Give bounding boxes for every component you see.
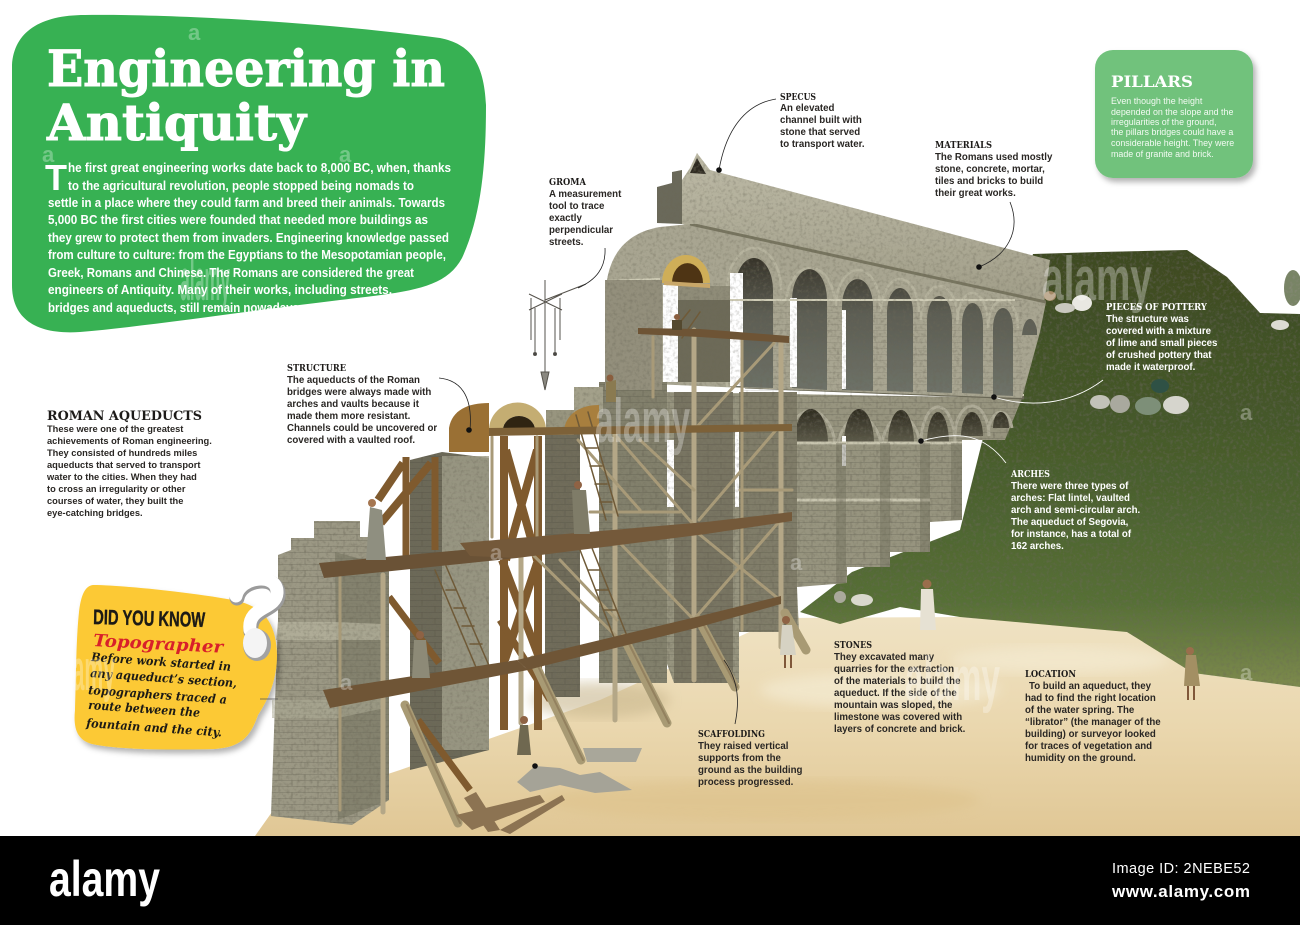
stock watermarks: alamy: [180, 248, 230, 313]
did you know text: route between the: [88, 698, 201, 720]
label: location: “librator” (the manager of the: [1025, 717, 1161, 728]
workers and figures: [366, 314, 1200, 755]
alamy logo: alamy: [49, 851, 160, 907]
drop cap: T: [45, 157, 67, 198]
stock watermarks: alamy: [1042, 245, 1152, 314]
label: pieces of pottery: of crushed pottery that: [1106, 350, 1212, 361]
timber centering and bracing: [378, 403, 599, 790]
footer band: [0, 836, 1300, 925]
did you know text: topographers traced a: [88, 683, 227, 707]
did you know text: [85, 650, 237, 739]
label: scaffolding: They raised vertical: [698, 741, 788, 752]
label: stones: They excavated many: [834, 652, 935, 663]
label: stones: quarries for the extraction: [834, 664, 954, 675]
label: stones: aqueduct. If the side of the: [834, 688, 957, 699]
green blob: [12, 15, 486, 332]
text block: Roman aqueducts: eye-catching bridges.: [47, 508, 143, 518]
intro text: engineers of Antiquity. Many of their works, including streets,: [48, 282, 392, 297]
label: materials: their great works.: [935, 188, 1016, 199]
label: structure: covered with a vaulted roof.: [287, 435, 415, 446]
intro text: he first great engineering works date back to 8,000 BC, when, thanks: [68, 160, 451, 175]
label: structure: bridges were always made with: [287, 387, 431, 398]
label: scaffolding: ground as the building: [698, 765, 802, 776]
label: specus: [780, 92, 865, 150]
pillars text: depended on the slope and the: [1111, 107, 1233, 117]
label: groma: streets.: [549, 237, 584, 248]
label: arches: ARCHES: [1010, 469, 1050, 480]
icon: tree at far right: [1284, 270, 1300, 306]
icon: question mark: [236, 579, 278, 661]
stock watermarks: a: [339, 142, 352, 167]
pillars heading: PILLARS: [1111, 72, 1193, 91]
label: stones: [834, 640, 966, 735]
scaffolding decks: [319, 328, 792, 708]
grassy hill: [800, 250, 1300, 687]
label: groma: tool to trace: [549, 201, 605, 212]
text block: Roman aqueducts: These were one of the greatest: [47, 424, 183, 434]
aqueduct: lower tier: [662, 384, 1024, 683]
leader: specus: [716, 99, 776, 173]
label: structure: arches and vaults because it: [287, 399, 420, 410]
intro text: 5,000 BC the first cities were founded that needed more buildings as: [48, 212, 428, 227]
did you know text: any aqueduct’s section,: [90, 666, 237, 690]
aqueduct: upper tier with arches: [606, 224, 1046, 398]
leader: arches: [918, 436, 1006, 463]
label: location: building) or surveyor looked: [1025, 729, 1156, 740]
intro text: they grew to protect them from invaders. Engineering knowledge passed: [48, 230, 449, 245]
label: specus: channel built with: [780, 115, 862, 126]
text block: Roman aqueducts: achievements of Roman engineering.: [47, 436, 212, 446]
pillars text: Even though the height: [1111, 96, 1203, 106]
label: location: LOCATION: [1025, 669, 1076, 680]
stock watermarks: a: [188, 20, 201, 45]
leader: scaffolding: [724, 660, 737, 724]
pillars text: considerable height. They were: [1111, 138, 1234, 148]
leader: rubble dot: [532, 763, 538, 769]
did you know heading: DID YOU KNOW: [93, 606, 206, 632]
intro text: Greek, Romans and Chinese. The Romans are considered the great: [48, 265, 415, 280]
label: arches: arch and semi-circular arch.: [1011, 505, 1141, 516]
label: materials: tiles and bricks to build: [935, 176, 1043, 187]
stock watermarks: a: [340, 670, 353, 695]
stone piers, foreground: [410, 280, 797, 770]
label: structure: [287, 363, 437, 446]
leader: pottery: [991, 380, 1103, 403]
panel: intro: [12, 15, 486, 332]
label: location: To build an aqueduct, they: [1029, 681, 1152, 692]
label: structure: STRUCTURE: [287, 363, 346, 374]
pillars card: [1095, 50, 1253, 178]
icon: groma surveying tool: [529, 280, 586, 390]
did you know text: fountain and the city.: [85, 716, 222, 739]
aqueduct: attic wall and specus: [657, 153, 1050, 304]
leader: groma: [578, 248, 605, 288]
raking props: [405, 613, 806, 823]
label: stones: STONES: [834, 640, 872, 651]
label: location: for traces of vegetation and: [1025, 741, 1152, 752]
label: pieces of pottery: covered with a mixture: [1106, 326, 1212, 337]
site url: www.alamy.com: [1111, 882, 1250, 901]
label: location: [1025, 669, 1161, 764]
stock watermarks: a: [1240, 400, 1253, 425]
title line two: Antiquity: [46, 93, 308, 152]
label: scaffolding: supports from the: [698, 753, 781, 764]
label: arches: 162 arches.: [1011, 541, 1064, 552]
label: arches: The aqueduct of Segovia,: [1011, 517, 1129, 528]
text block: Roman aqueducts: aqueducts that served to transport: [47, 460, 200, 470]
gold arch centering: [662, 255, 710, 288]
label: structure: Channels could be uncovered or: [287, 423, 437, 434]
topographer heading: Topographer: [93, 631, 225, 658]
label: materials: stone, concrete, mortar,: [935, 164, 1045, 175]
ground: sand: [255, 617, 1300, 836]
leader: structure: [439, 378, 472, 433]
stock watermarks: a: [490, 540, 503, 565]
label: pieces of pottery: [1106, 302, 1217, 373]
label: stones: of the materials to build the: [834, 676, 961, 687]
intro text: bridges and aqueducts, still remain nowadays.: [48, 300, 302, 315]
text block: Roman aqueducts: water to the cities. When they had: [46, 472, 197, 482]
label: groma: [549, 177, 622, 248]
label: groma: A measurement: [549, 189, 622, 200]
label: stones: limestone was covered with: [834, 712, 962, 723]
text block: Roman aqueducts: ROMAN AQUEDUCTS: [47, 409, 202, 424]
scaffolding: posts, diagonals and decks: [340, 310, 806, 823]
intro text: from culture to culture: from the Egyptians to the Mesopotamian people,: [48, 247, 446, 262]
label: specus: SPECUS: [780, 92, 816, 103]
label: arches: arches: Flat lintel, vaulted: [1011, 493, 1130, 504]
yellow card: [75, 585, 277, 749]
intro text: to the agricultural revolution, people stopped being nomads to: [68, 178, 414, 193]
foreground corner pier: [271, 521, 389, 825]
intro text: settle in a place where they could farm and breed their animals. Towards: [48, 195, 445, 210]
text block: Roman aqueducts: courses of water, they built the: [47, 496, 183, 506]
image id: Image ID: 2NEBE52: [1112, 861, 1250, 877]
label: location: of the water spring. The: [1025, 705, 1135, 716]
pillars text: irregularities of the ground,: [1111, 117, 1217, 127]
label: arches: for instance, has a total of: [1011, 529, 1132, 540]
label: scaffolding: process progressed.: [698, 777, 794, 788]
pillars text: the pillars bridges could have a: [1111, 127, 1233, 137]
callout: did you know: [75, 579, 278, 749]
label: materials: MATERIALS: [935, 140, 992, 151]
label: materials: [935, 140, 1053, 199]
ladders: [435, 310, 700, 672]
leader: did you know to pier: [260, 698, 278, 700]
label: arches: [1010, 469, 1141, 552]
label: arches: There were three types of: [1011, 481, 1129, 492]
label: pieces of pottery: PIECES OF POTTERY: [1106, 302, 1207, 313]
label: pieces of pottery: made it waterproof.: [1106, 362, 1196, 373]
label: pieces of pottery: The structure was: [1106, 314, 1189, 325]
text block: Roman aqueducts: They consisted of hundreds miles: [47, 448, 197, 458]
leader: materials: [976, 202, 1014, 270]
label: stones: mountain was sloped, the: [834, 700, 953, 711]
label: scaffolding: [698, 729, 802, 788]
stock watermarks: alamy: [905, 645, 1000, 714]
stock watermarks: alamy: [55, 638, 115, 703]
label: groma: GROMA: [549, 177, 587, 188]
label: structure: made them more resistant.: [287, 411, 411, 422]
panel: pillars: [1095, 50, 1253, 178]
stone rubble and timber pile: [456, 748, 642, 834]
label: materials: The Romans used mostly: [935, 152, 1053, 163]
label: specus: stone that served: [780, 127, 860, 138]
label: scaffolding: SCAFFOLDING: [698, 729, 765, 740]
text block: Roman aqueducts: to cross an irregularity or other: [47, 484, 186, 494]
stock watermarks: a: [790, 550, 803, 575]
label: stones: layers of concrete and brick.: [834, 724, 966, 735]
boulders on the hill: [834, 291, 1289, 606]
label: specus: An elevated: [780, 103, 834, 114]
stock watermarks: alamy: [595, 387, 690, 456]
label: structure: The aqueducts of the Roman: [287, 375, 420, 386]
label: specus: to transport water.: [780, 139, 865, 150]
label: pieces of pottery: of lime and small pieces: [1106, 338, 1217, 349]
stock watermarks: a: [1240, 660, 1253, 685]
title: Engineering in: [47, 39, 445, 98]
stock watermarks: a: [42, 142, 55, 167]
pillars text: made of granite and brick.: [1111, 149, 1214, 159]
label: location: humidity on the ground.: [1025, 753, 1136, 764]
stock watermarks: [42, 20, 1253, 714]
label: groma: exactly: [549, 213, 582, 224]
did you know text: Before work started in: [90, 650, 231, 674]
text block: Roman aqueducts: [46, 409, 212, 518]
label: location: had to find the right location: [1025, 693, 1156, 704]
label: groma: perpendicular: [549, 225, 613, 236]
